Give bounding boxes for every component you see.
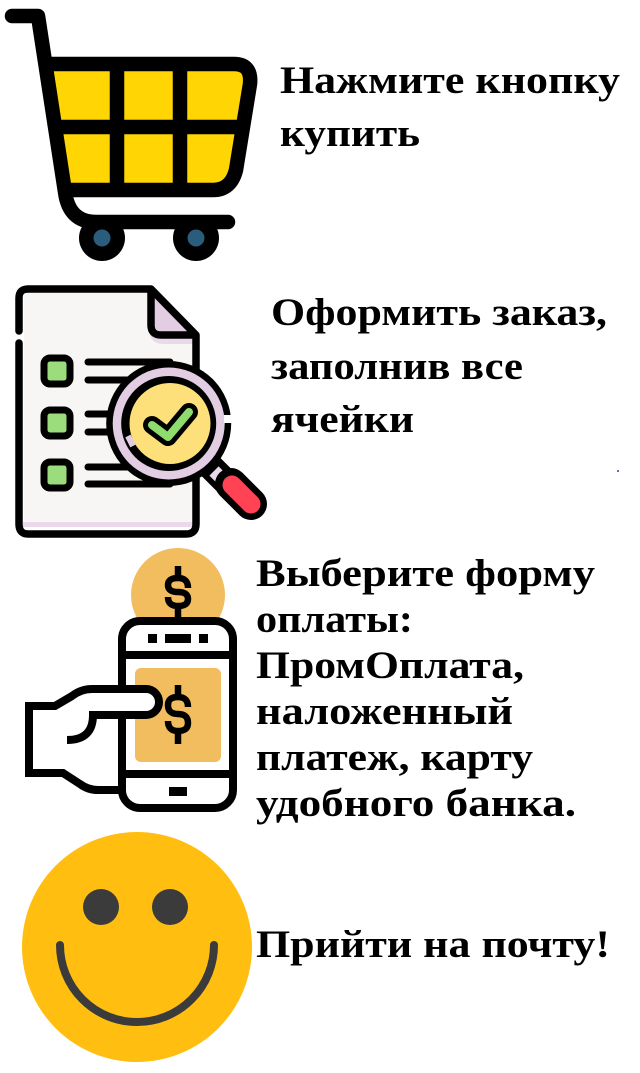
step 2 text: ячейки	[271, 398, 414, 441]
step 4: smiley icon	[22, 832, 252, 1062]
hand	[29, 689, 159, 790]
checkboxes	[44, 358, 70, 488]
coin	[131, 548, 225, 642]
step 3 text: Выберите форму	[256, 552, 596, 595]
step 3 text: платеж, карту	[256, 736, 534, 779]
dollar sign on coin	[168, 566, 188, 619]
step 3 text	[256, 552, 596, 825]
stray dot	[617, 470, 619, 472]
step 3 text: наложенный	[256, 690, 513, 733]
step 3 text: оплаты:	[256, 598, 413, 641]
step 3 text: ПромОплата,	[256, 644, 524, 687]
step 4 text: Прийти на почту!	[256, 923, 610, 966]
step 3 text: удобного банка.	[256, 782, 576, 825]
magnifier lens	[106, 361, 232, 486]
step 2 text: заполнив все	[271, 345, 523, 388]
step 1 text: купить	[280, 112, 420, 155]
step 3: phone payment icon	[29, 548, 233, 808]
step 1 text: Нажмите кнопку	[280, 59, 621, 102]
step 1: shopping cart icon	[12, 16, 250, 261]
step 2 text	[271, 291, 607, 441]
dollar sign on screen	[168, 685, 188, 744]
magnifier handle	[210, 466, 251, 504]
step 2: document with magnifier icon	[19, 289, 251, 534]
step 2 text: Оформить заказ,	[271, 291, 607, 334]
step 1 text	[280, 59, 621, 155]
phone body	[122, 621, 233, 808]
